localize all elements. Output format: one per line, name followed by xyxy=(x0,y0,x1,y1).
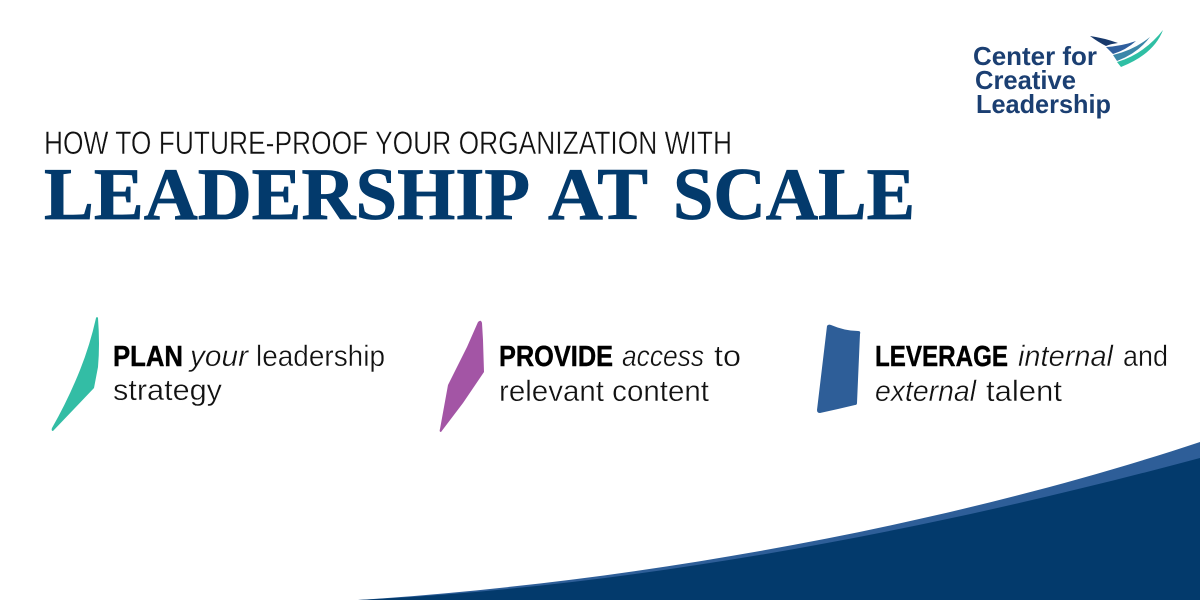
icon: purple shard xyxy=(440,321,484,432)
text: provide xyxy=(499,340,741,408)
logo wordmark xyxy=(973,41,1111,119)
text: leverage: talent xyxy=(986,375,1063,408)
logo: Center for Creative Leadership xyxy=(973,30,1163,119)
logo wordmark: Leadership xyxy=(976,89,1111,119)
title: SCALE xyxy=(673,154,915,236)
text: leverage: internal xyxy=(1018,340,1114,373)
text: provide: to xyxy=(714,340,741,373)
title xyxy=(44,154,915,236)
text: provide: PROVIDE xyxy=(499,341,613,373)
step: plan xyxy=(52,317,385,431)
step: provide xyxy=(440,321,741,432)
text: provide: access xyxy=(622,340,704,373)
subtitle: HOW TO FUTURE-PROOF YOUR ORGANIZATION WITH xyxy=(44,125,732,161)
title: AT xyxy=(548,154,648,236)
icon: teal shard xyxy=(52,317,99,431)
text: plan: your xyxy=(188,340,249,373)
logo swoosh mark xyxy=(1090,30,1163,67)
text: plan xyxy=(113,340,385,407)
text: provide: relevant content xyxy=(499,375,710,408)
text: plan: PLAN xyxy=(113,341,183,373)
text: leverage: and xyxy=(1123,340,1168,373)
text: leverage: external xyxy=(875,375,977,408)
text: leverage: LEVERAGE xyxy=(875,341,1008,373)
text: leverage xyxy=(875,340,1168,408)
icon: blue shard xyxy=(817,325,860,413)
logo wordmark: Creative xyxy=(975,65,1076,95)
bottom swoosh xyxy=(358,442,1200,600)
step: leverage xyxy=(817,325,1168,413)
logo wordmark: Center for xyxy=(973,41,1097,71)
title: LEADERSHIP xyxy=(44,154,530,236)
text: plan: leadership xyxy=(256,340,385,373)
text: plan: strategy xyxy=(113,374,222,407)
